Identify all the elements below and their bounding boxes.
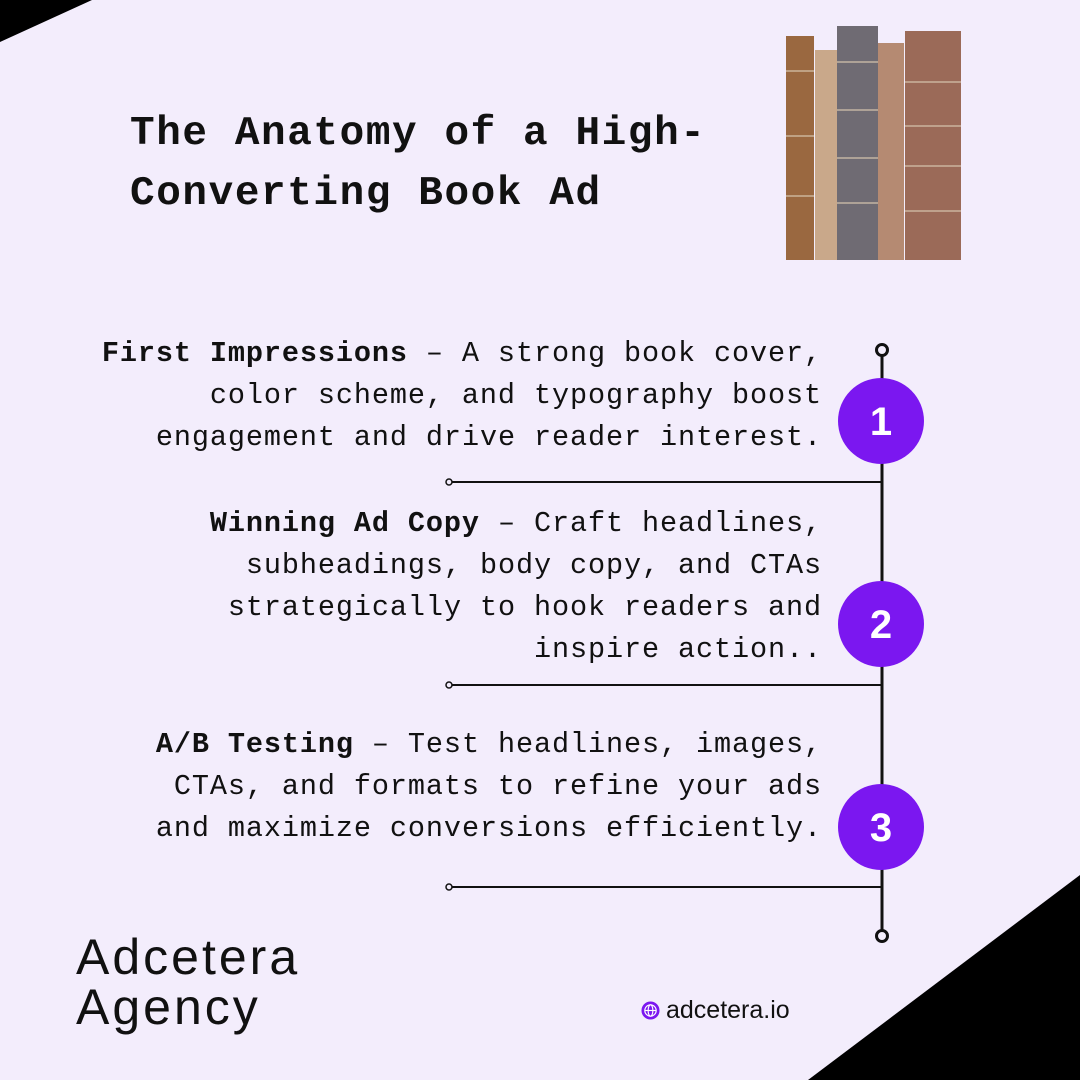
step 1 badge bbox=[838, 378, 924, 464]
title bbox=[130, 111, 706, 217]
image: books bbox=[786, 26, 961, 260]
text: winning ad copy: Winning Ad Copy – Craft headlines, bbox=[210, 507, 822, 540]
text: a/b testing: and maximize conversions efficiently. bbox=[156, 812, 822, 845]
step 2 badge: 2 bbox=[870, 603, 892, 647]
logo: Agency bbox=[76, 979, 261, 1035]
text: winning ad copy: strategically to hook readers and bbox=[228, 591, 822, 624]
step 1 badge: 1 bbox=[870, 400, 892, 444]
text: a/b testing: A/B Testing – Test headlines, images, bbox=[156, 728, 822, 761]
title: The Anatomy of a High- bbox=[130, 111, 706, 157]
text: first impressions: First Impressions – A strong book cover, bbox=[102, 337, 822, 370]
text: winning ad copy: subheadings, body copy, and CTAs bbox=[246, 549, 822, 582]
step 3 badge: 3 bbox=[870, 806, 892, 850]
website: adcetera.io bbox=[666, 996, 790, 1024]
text: a/b testing: CTAs, and formats to refine your ads bbox=[174, 770, 822, 803]
text: winning ad copy bbox=[210, 507, 822, 666]
text: a/b testing bbox=[156, 728, 822, 845]
text: first impressions: engagement and drive reader interest. bbox=[156, 421, 822, 454]
text: winning ad copy: inspire action.. bbox=[534, 633, 822, 666]
logo: Adcetera bbox=[76, 929, 300, 985]
step 3 badge bbox=[838, 784, 924, 870]
step 2 badge bbox=[838, 581, 924, 667]
title: Converting Book Ad bbox=[130, 171, 602, 217]
logo bbox=[76, 929, 300, 1035]
text: first impressions: color scheme, and typography boost bbox=[210, 379, 822, 412]
text: first impressions bbox=[102, 337, 822, 454]
